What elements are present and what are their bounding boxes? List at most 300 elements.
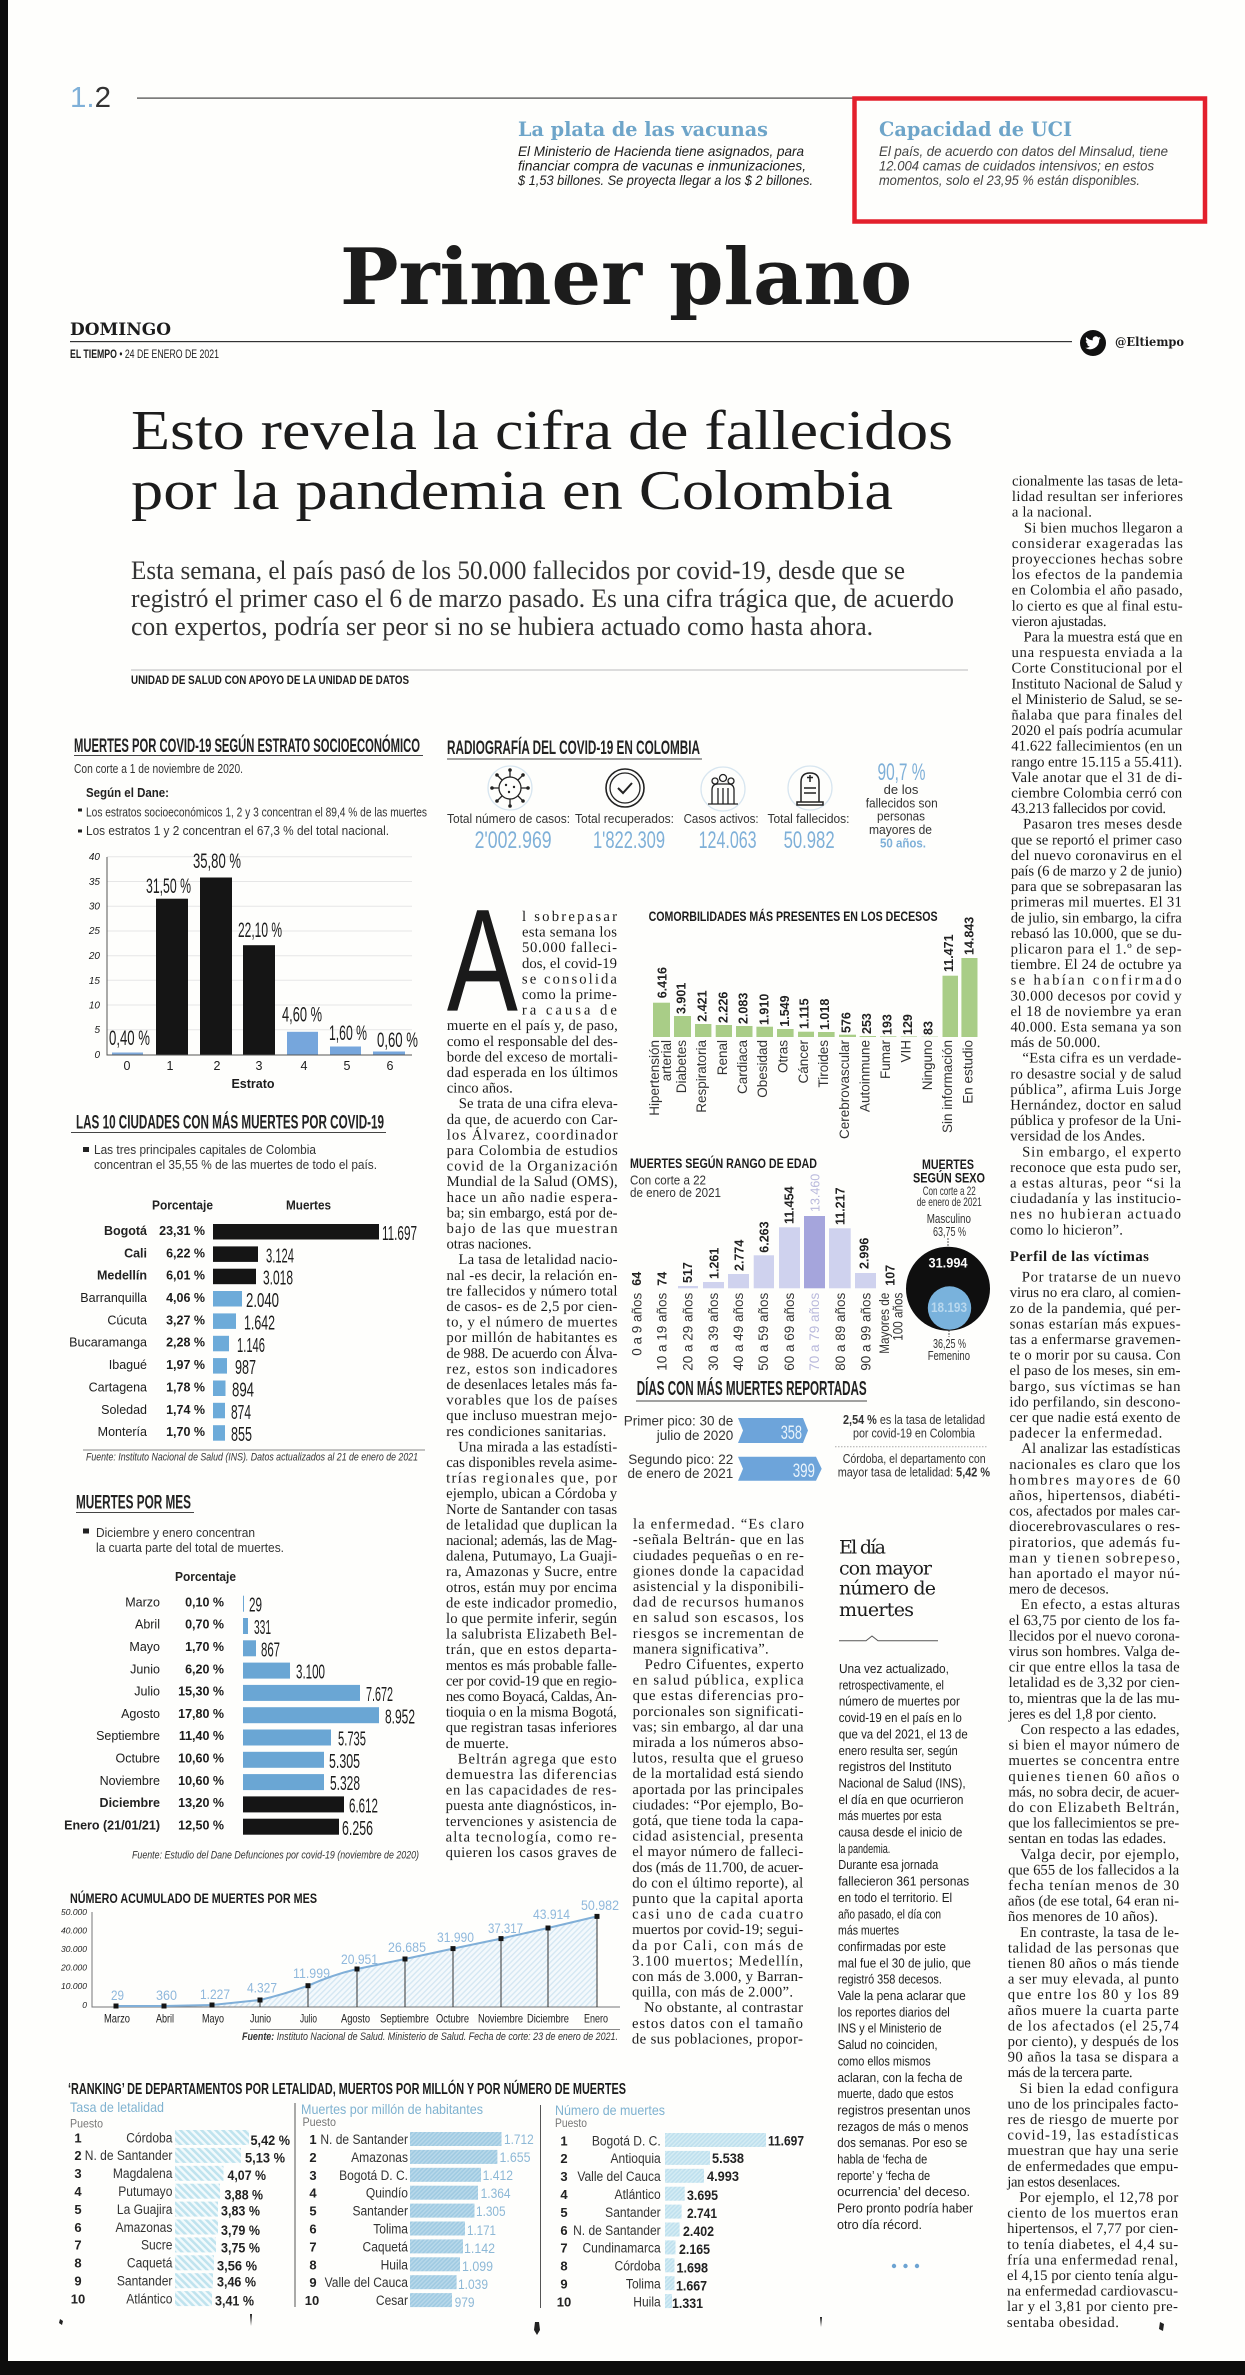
article column 1: de desenlaces letales más fa- — [446, 1377, 617, 1393]
article column 2: gotá, que tiene toda la capa- — [632, 1813, 803, 1829]
sidebar text: enero resulta ser, según — [839, 1743, 958, 1758]
callout: 90,7 % — [866, 759, 938, 850]
month percentages: 1,70 % — [185, 1640, 224, 1654]
article column 4: han aportado el mayor nú- — [1009, 1566, 1180, 1582]
bar chart: 40 — [89, 852, 100, 863]
article column 2: el mayor número de falleci- — [632, 1844, 803, 1860]
article column 4: do con Elizabeth Beltrán, — [1008, 1800, 1179, 1816]
article column 4: que se reportó el primer caso — [1011, 832, 1182, 848]
teaser: Capacidad de UCI (red box): El país, de acuerdo con datos del Minsalud, tiene — [879, 143, 1168, 159]
article column 1: ba; sin embargo, está por de- — [447, 1205, 618, 1221]
sidebar text: otro día récord. — [837, 2217, 922, 2232]
age labels: 90 a 99 años — [858, 1292, 874, 1371]
article column 4: bargo, sus víctimas se han — [1009, 1379, 1181, 1395]
article column 1: quieren los casos graves de — [446, 1845, 617, 1861]
age labels: 50 a 59 años — [756, 1292, 771, 1371]
age labels: Mayores de — [877, 1293, 892, 1354]
age labels: 30 a 39 años — [706, 1292, 721, 1371]
month values: 867 — [261, 1639, 280, 1661]
ranking: number of deaths: Cundinamarca — [582, 2240, 661, 2256]
line chart: 360 — [156, 1988, 177, 2003]
bar values: 11.471 — [942, 934, 956, 972]
article column 4: ro desastre social y de salud — [1010, 1066, 1182, 1082]
fatality note: por covid-19 en Colombia — [853, 1427, 975, 1441]
panel: deaths by month — [64, 1493, 419, 1862]
bar chart: 35 — [89, 877, 100, 888]
stat values: 50.982 — [784, 827, 835, 854]
article column 1: La tasa de letalidad nacio- — [458, 1252, 618, 1268]
month names: Noviembre — [100, 1774, 160, 1788]
line chart: 31.990 — [437, 1930, 474, 1945]
sidebar text — [837, 1661, 976, 2232]
ranking: fatality rate: 4 — [74, 2184, 82, 2199]
intro text: Los estratos 1 y 2 concentran el 67,3 % del total nacional. — [86, 824, 389, 838]
cutoff note: 63,75 % — [933, 1224, 966, 1239]
stat labels: Total recuperados: — [575, 811, 674, 826]
city percentages: 4,06 % — [166, 1291, 205, 1305]
month percentages: 13,20 % — [178, 1796, 224, 1810]
line chart: Agosto — [341, 2012, 370, 2026]
ranking: deaths per million: Puesto — [302, 2115, 336, 2129]
article column 4: mero de decesos. — [1009, 1582, 1109, 1598]
bar values: 1.549 — [778, 995, 792, 1027]
month percentages: 11,40 % — [179, 1729, 224, 1743]
icon: people — [701, 767, 745, 811]
article column 4: para que se sobrepasaran las — [1011, 879, 1182, 895]
callout: 90,7 %: fallecidos son — [866, 795, 938, 810]
teaser: La plata de las vacunas: La plata de las vacunas — [518, 117, 768, 141]
bar chart: 31,50 % — [146, 875, 191, 898]
article column 2: de la mortalidad está siendo — [632, 1766, 803, 1782]
article column 1: de 988. De acuerdo con Álva- — [446, 1345, 617, 1362]
bar values: 2.083 — [736, 993, 750, 1024]
article column 4: Con respecto a las edades, — [1021, 1722, 1180, 1738]
bar chart: 0,40 % — [109, 1027, 150, 1050]
panel: days with most deaths — [624, 1377, 990, 1482]
month names: Abril — [135, 1618, 160, 1632]
article column 4: años muere la cuarta parte — [1008, 2003, 1179, 2019]
article column 2: da por Cali, con más de — [632, 1938, 804, 1954]
ranking: fatality rate: Tasa de letalidad — [70, 2099, 164, 2115]
article column 4: letalidad es de 3,32 por cien- — [1009, 1675, 1180, 1691]
female label: 36,25 % — [933, 1336, 966, 1351]
month percentages: 6,20 % — [185, 1662, 224, 1676]
female label: Femenino — [928, 1348, 970, 1363]
sidebar title: muertes — [839, 1599, 914, 1621]
article column 1: muerte en el país y, de paso, — [447, 1018, 618, 1034]
line chart: Junio — [250, 2012, 271, 2026]
fatality note — [835, 1413, 990, 1480]
bar chart: 0 — [94, 1050, 100, 1061]
article column 1: en las capacidades de res- — [446, 1783, 617, 1799]
panel: deaths by sex — [906, 1157, 990, 1363]
bar labels: Tiroides — [816, 1040, 831, 1088]
sidebar text: la pandemia. — [838, 1841, 890, 1856]
article column 2: do con el último reporte), al — [632, 1875, 803, 1891]
ranking: deaths per million: 9 — [309, 2275, 317, 2290]
article column 1: de este indicador promedio, — [446, 1595, 617, 1611]
ranking: number of deaths: 7 — [560, 2241, 568, 2256]
article column 2: la enfermedad. “Es claro — [633, 1517, 804, 1533]
article column 1: mentos es más probable falle- — [446, 1658, 617, 1674]
article column 4: Hernández, doctor en salud — [1010, 1098, 1182, 1114]
city percentages: 2,28 % — [166, 1336, 205, 1350]
line chart: 10.000 — [61, 1981, 87, 1991]
sidebar text: dos semanas. Por eso se — [837, 2135, 967, 2150]
month names: Enero (21/01/21) — [64, 1818, 160, 1832]
article column 4: años, hipertensos, diabéti- — [1009, 1488, 1180, 1504]
second peak: 399 — [793, 1461, 815, 1482]
ranking: deaths per million: 1.142 — [464, 2240, 495, 2256]
article column 4: Si bien la edad configura — [1020, 2081, 1179, 2097]
city values: 2.040 — [246, 1290, 279, 1312]
article column 1: la salubrista Elizabeth Bel- — [446, 1627, 617, 1643]
article column 2: 3.100 muertos; Medellín, — [632, 1953, 803, 1969]
ranking: fatality rate: Sucre — [141, 2237, 172, 2253]
article column 2: con más de 3.000, y Barran- — [632, 1969, 803, 1985]
sidebar title: El día — [839, 1536, 886, 1558]
source: Fuente: Estudio del Dane Defunciones por covid-19 (noviembre de 2020) — [132, 1850, 419, 1862]
bar chart: 5 — [94, 1025, 100, 1036]
sidebar: El día con mayor número de muertes — [837, 1536, 976, 2268]
month percentages: 10,60 % — [178, 1774, 224, 1788]
ranking: deaths per million: Cesar — [376, 2292, 409, 2308]
article column 4: primeras mil muertes. El 31 — [1011, 895, 1182, 911]
table headers: Porcentaje — [152, 1199, 213, 1213]
month values: 331 — [254, 1617, 271, 1639]
section title: Primer plano: Primer plano — [340, 232, 912, 323]
city percentages: 1,78 % — [166, 1380, 205, 1394]
section tag: Domingo: DOMINGO — [70, 320, 171, 340]
article column 4: tienen 80 años o más tiende — [1008, 1956, 1179, 1972]
article column 4: lidad resultan ser inferiores — [1012, 489, 1183, 505]
intro text — [74, 762, 427, 838]
icon: check — [606, 769, 644, 807]
bar values: 129 — [901, 1014, 915, 1035]
article column 4: ciento de los muertos eran — [1007, 2206, 1179, 2222]
bar labels: Otras — [776, 1040, 790, 1073]
line chart: 37.317 — [488, 1921, 523, 1936]
article column 2: lutos, resulta que el grueso — [632, 1751, 803, 1767]
heading: MUERTES POR COVID-19 SEGÚN ESTRATO SOCIOECONÓMICO — [74, 735, 420, 757]
callout: 90,7 %: mayores de — [869, 822, 932, 837]
ranking: deaths per million: 1.712 — [504, 2131, 534, 2147]
article column 4: 90 años la tasa se dispara a — [1008, 2050, 1179, 2066]
sidebar text: retrospectivamente, el — [839, 1677, 944, 1692]
article column 4: ciembre Colombia cerró con — [1011, 786, 1183, 802]
panel: comorbidities chart — [647, 908, 978, 1139]
article column 2: dos (más de 11.700, de acuer- — [632, 1860, 803, 1876]
article column 4: el Ministerio de Salud, se se- — [1011, 692, 1182, 708]
ranking: number of deaths: 3.695 — [687, 2187, 718, 2203]
month names: Octubre — [116, 1752, 160, 1766]
sidebar text: habla de ‘fecha de — [837, 2152, 927, 2166]
article column 4: Instituto Nacional de Salud y — [1011, 676, 1183, 692]
sidebar text: número de muertes por — [839, 1694, 960, 1709]
article column 1: Una mirada a las estadísti- — [458, 1439, 617, 1455]
article column 1: demuestra las diferencias — [446, 1767, 617, 1783]
bars — [653, 958, 978, 1037]
ranking: number of deaths: 10 — [557, 2294, 571, 2309]
bar chart: Estrato — [231, 1077, 275, 1091]
article column 4: sentaba obesidad. — [1007, 2315, 1119, 2331]
ranking: deaths per million: 1.039 — [458, 2276, 488, 2292]
bar labels: Sin información — [940, 1040, 955, 1133]
callout: 90,7 %: personas — [877, 809, 925, 824]
heading: MUERTES POR MES — [76, 1493, 191, 1514]
note — [83, 1526, 284, 1555]
ranking: deaths per million: 1.364 — [481, 2185, 511, 2201]
article column 4: virus no era claro, al comien- — [1010, 1285, 1181, 1301]
ranking: number of deaths: 2 — [560, 2151, 568, 2166]
sidebar text: confirmadas por este — [838, 1939, 946, 1954]
city percentages: 6,22 % — [166, 1246, 205, 1260]
ranking: deaths per million: Santander — [352, 2203, 409, 2219]
article column 1: hace un año nadie espera- — [447, 1190, 618, 1206]
article column 1: trías regionales que, por — [446, 1471, 617, 1487]
ranking: fatality rate: Atlántico — [126, 2291, 172, 2307]
article column 4: el 63,75 por ciento de los fa- — [1009, 1613, 1180, 1629]
ranking: fatality rate: Amazonas — [116, 2219, 173, 2235]
icon: virus — [488, 766, 532, 810]
note: Las tres principales capitales de Colombia — [94, 1143, 316, 1157]
line chart: 20.000 — [60, 1962, 87, 1972]
line chart: 11.999 — [293, 1966, 330, 1981]
article column 1: cinco años. — [447, 1081, 513, 1097]
bar values: 83 — [922, 1021, 936, 1035]
city names: Bogotá — [104, 1224, 147, 1238]
city names: Ibagué — [109, 1358, 147, 1372]
bar labels: Respiratoria — [694, 1040, 709, 1113]
ranking: number of deaths: 2.165 — [679, 2241, 710, 2257]
city names: Montería — [98, 1425, 147, 1439]
ranking: fatality rate: 5,13 % — [245, 2149, 285, 2165]
ranking: fatality rate: Caquetá — [127, 2255, 173, 2271]
bar labels: Cáncer — [796, 1040, 811, 1084]
article column 4: ido perfilando, sin descono- — [1009, 1394, 1181, 1410]
article column 4: jeres es del 1,8 por ciento. — [1008, 1706, 1157, 1722]
month values: 5.735 — [338, 1729, 366, 1751]
bar chart: 0,60 % — [377, 1029, 418, 1052]
ranking: number of deaths: Huila — [633, 2294, 661, 2310]
article column 4: man y tienen sobrepeso, — [1009, 1550, 1180, 1566]
age labels: 80 a 89 años — [833, 1292, 848, 1371]
article column 4: una respuesta enviada a la — [1011, 645, 1183, 661]
bar labels: Obesidad — [755, 1040, 770, 1098]
article column 1: Beltrán agrega que esto — [458, 1751, 617, 1767]
article column 1: cas disponibles revela asime- — [446, 1455, 617, 1471]
article column 1: que registran tasas inferiores — [446, 1720, 617, 1736]
age labels: 20 a 29 años — [680, 1292, 696, 1371]
ranking: fatality rate: 4,07 % — [228, 2167, 266, 2183]
article column 2: ciudades: “Por ejemplo, Bo- — [632, 1797, 803, 1813]
sidebar text: más muertes por esta — [838, 1808, 942, 1823]
sidebar text: Salud no coinciden, — [838, 2037, 938, 2052]
bar labels: Ninguno — [920, 1040, 935, 1090]
bar values: 74 — [656, 1272, 670, 1286]
icon: tombstone — [788, 766, 832, 810]
ranking: number of deaths: 6 — [560, 2223, 568, 2238]
bar values: 2.774 — [732, 1240, 746, 1271]
article column 1: dalena, Putumayo, La Guaji- — [446, 1549, 617, 1565]
article column 4: más de 50.000. — [1010, 1035, 1100, 1051]
article column 4: proyecciones hechas sobre — [1012, 552, 1183, 568]
month values: 5.328 — [330, 1773, 360, 1795]
sidebar text: registró 358 decesos. — [838, 1972, 942, 1987]
article column 4: fecha tenían menos de 30 — [1008, 1878, 1179, 1894]
ranking: number of deaths: 1.667 — [676, 2278, 707, 2294]
line chart: 50.000 — [61, 1907, 87, 1917]
article column 4: que 655 de los fallecidos a la — [1008, 1862, 1180, 1878]
standfirst — [131, 556, 954, 641]
article column 4: En efecto, a estas alturas — [1021, 1597, 1180, 1613]
city names: Cúcuta — [107, 1313, 147, 1327]
article column 4: uno de los principales facto- — [1007, 2096, 1179, 2112]
ranking: number of deaths: 11.697 — [768, 2132, 804, 2148]
note — [83, 1143, 377, 1172]
cutoff note — [917, 1184, 982, 1239]
article column 4: país (6 de marzo y 2 de junio) — [1011, 864, 1182, 880]
ranking: deaths per million: 7 — [309, 2239, 317, 2254]
female label — [928, 1336, 970, 1363]
ranking: fatality rate: 6 — [74, 2220, 82, 2235]
table headers: Muertes — [286, 1199, 331, 1213]
sidebar text: reporte’ y ‘fecha de — [837, 2168, 930, 2183]
article column 4: como lo hicieron”. — [1010, 1222, 1123, 1238]
teaser: La plata de las vacunas: financiar compra de vacunas e inmunizaciones, — [518, 158, 806, 174]
month values — [249, 1594, 415, 1840]
month names: Mayo — [129, 1640, 160, 1654]
bar values: 1.115 — [798, 998, 812, 1029]
stat values: 1'822.309 — [593, 827, 665, 854]
sidebar text: más muertes — [838, 1923, 899, 1938]
bar values: 517 — [681, 1262, 695, 1283]
intro text: Con corte a 1 de noviembre de 2020. — [74, 762, 243, 776]
month names: Julio — [134, 1685, 160, 1699]
city values: 874 — [231, 1402, 251, 1424]
bar labels: Renal — [715, 1040, 730, 1075]
ranking: deaths per million: Caquetá — [363, 2239, 409, 2255]
bar labels: En estudio — [960, 1040, 976, 1104]
ranking: number of deaths: 8 — [560, 2259, 568, 2274]
bar values: 11.217 — [834, 1187, 848, 1225]
second peak: Segundo pico: 22 — [628, 1452, 733, 1467]
article column 1: como el responsable del des- — [447, 1034, 618, 1050]
article column 1: l sobrepasar — [522, 909, 617, 925]
article column 4: diocerebrovasculares o res- — [1009, 1519, 1180, 1535]
article column 4: llecidos por el nuevo corona- — [1009, 1628, 1180, 1644]
bar chart: 5 — [344, 1059, 351, 1073]
bar values: 2.421 — [696, 990, 710, 1022]
ranking: fatality rate: Córdoba — [126, 2129, 173, 2146]
sidebar text: registros del Instituto — [839, 1759, 952, 1774]
article column 4: “Esta cifra es un verdade- — [1022, 1051, 1182, 1067]
standfirst: Esta semana, el país pasó de los 50.000 fallecidos por covid-19, desde que se — [131, 556, 905, 585]
intro text: Los estratos socioeconómicos 1, 2 y 3 concentran el 89,4 % de las muertes — [86, 806, 427, 820]
article column 4: más de la tercera parte. — [1008, 2065, 1133, 2081]
article column 4: Sin embargo, el experto — [1022, 1144, 1181, 1160]
ranking: deaths per million — [301, 2101, 534, 2310]
bar labels: Autoinmune — [858, 1040, 873, 1112]
bar values: 107 — [884, 1265, 898, 1286]
heading: SEGÚN SEXO — [913, 1171, 985, 1186]
article column 1: nacional; además, las de Mag- — [446, 1533, 617, 1549]
sidebar text: Pero pronto podría haber — [837, 2201, 974, 2216]
month percentages — [178, 1595, 224, 1832]
city percentages — [159, 1224, 205, 1439]
sidebar text: mal fue el 30 de julio, que — [838, 1955, 971, 1970]
article column 4: de los afectados (el 25,74 — [1008, 2018, 1179, 2034]
heading: DÍAS CON MÁS MUERTES REPORTADAS — [637, 1377, 867, 1400]
ranking: deaths per million: 1 — [309, 2132, 317, 2147]
sidebar text: causa desde el inicio de — [838, 1825, 962, 1840]
ranking: number of deaths: 1.698 — [676, 2260, 708, 2276]
article column 4: los efectos de la pandemia — [1012, 567, 1183, 583]
city percentages: 6,01 % — [166, 1269, 205, 1283]
stat values: 2'002.969 — [475, 827, 552, 854]
city values — [231, 1223, 417, 1446]
ranking: fatality rate: 1 — [74, 2130, 82, 2145]
article column 4: 43.213 fallecidos por covid. — [1011, 801, 1166, 817]
article column 4 — [1006, 474, 1184, 2331]
bar chart: 0 — [124, 1059, 131, 1073]
cutoff note: Masculino — [927, 1211, 971, 1226]
article column 4: nes no hubieran actuado — [1010, 1207, 1181, 1223]
ranking: number of deaths: 3 — [560, 2169, 568, 2184]
article column 4: hipertensos, el 7,77 por cien- — [1007, 2221, 1178, 2237]
article column 4: to tenía diabetes, el 4,4 su- — [1007, 2237, 1178, 2253]
ranking: deaths per million: 6 — [309, 2222, 317, 2236]
bar values: 11.454 — [782, 1186, 796, 1224]
bar values: 2.226 — [716, 992, 730, 1023]
ranking: deaths per million: 3 — [309, 2168, 317, 2183]
article column 4: na enfermedad cardiovascu- — [1007, 2284, 1178, 2300]
month values: 3.100 — [296, 1662, 325, 1684]
article column 4: muestran que hay una serie — [1007, 2143, 1179, 2159]
line chart: 29 — [111, 1988, 124, 2003]
line chart — [60, 1898, 620, 2026]
bar values: 6.416 — [656, 967, 670, 998]
bar values: 64 — [630, 1272, 644, 1286]
article column 2: casi uno de cada cuatro — [632, 1907, 803, 1923]
ranking: number of deaths: Antioquia — [611, 2150, 661, 2166]
city names: Cartagena — [89, 1380, 147, 1394]
city names: Barranquilla — [80, 1291, 147, 1305]
month values: 8.952 — [385, 1706, 415, 1728]
line chart: Julio — [300, 2012, 317, 2026]
article column 2: en salud son escasos, los — [633, 1610, 804, 1626]
bar chart — [88, 850, 418, 1091]
source: Fuente: Instituto Nacional de Salud (INS). Datos actualizados al 21 de enero de 2021 — [86, 1452, 418, 1464]
article column 2: de sus poblaciones, propor- — [632, 2031, 803, 2047]
table headers — [152, 1199, 331, 1213]
bubble chart: 18.193 — [931, 1300, 967, 1315]
city percentages: 23,31 % — [159, 1224, 205, 1238]
ranking: number of deaths: 4.993 — [707, 2168, 739, 2184]
sidebar title: con mayor — [839, 1558, 933, 1580]
article column 2: No obstante, al contrastar — [644, 2000, 803, 2016]
article column 1: to, y el número de muertes — [446, 1315, 618, 1331]
city values: 987 — [235, 1357, 256, 1379]
article column 1: otros, están muy por encima — [446, 1580, 617, 1596]
article column 2: mirada a los números abso- — [632, 1735, 804, 1751]
bar chart: 6 — [387, 1059, 394, 1073]
heading: ‘RANKING’ DE DEPARTAMENTOS POR LETALIDAD, MUERTOS POR MILLÓN Y POR NÚMERO DE MUERTES — [68, 2080, 626, 2098]
article column 4: reconoce que esta pudo ser, — [1010, 1160, 1181, 1176]
bar chart: 25 — [88, 926, 100, 937]
article column 4: lar y el 3,81 por ciento pre- — [1007, 2299, 1178, 2315]
ranking: fatality rate: 10 — [71, 2291, 85, 2306]
